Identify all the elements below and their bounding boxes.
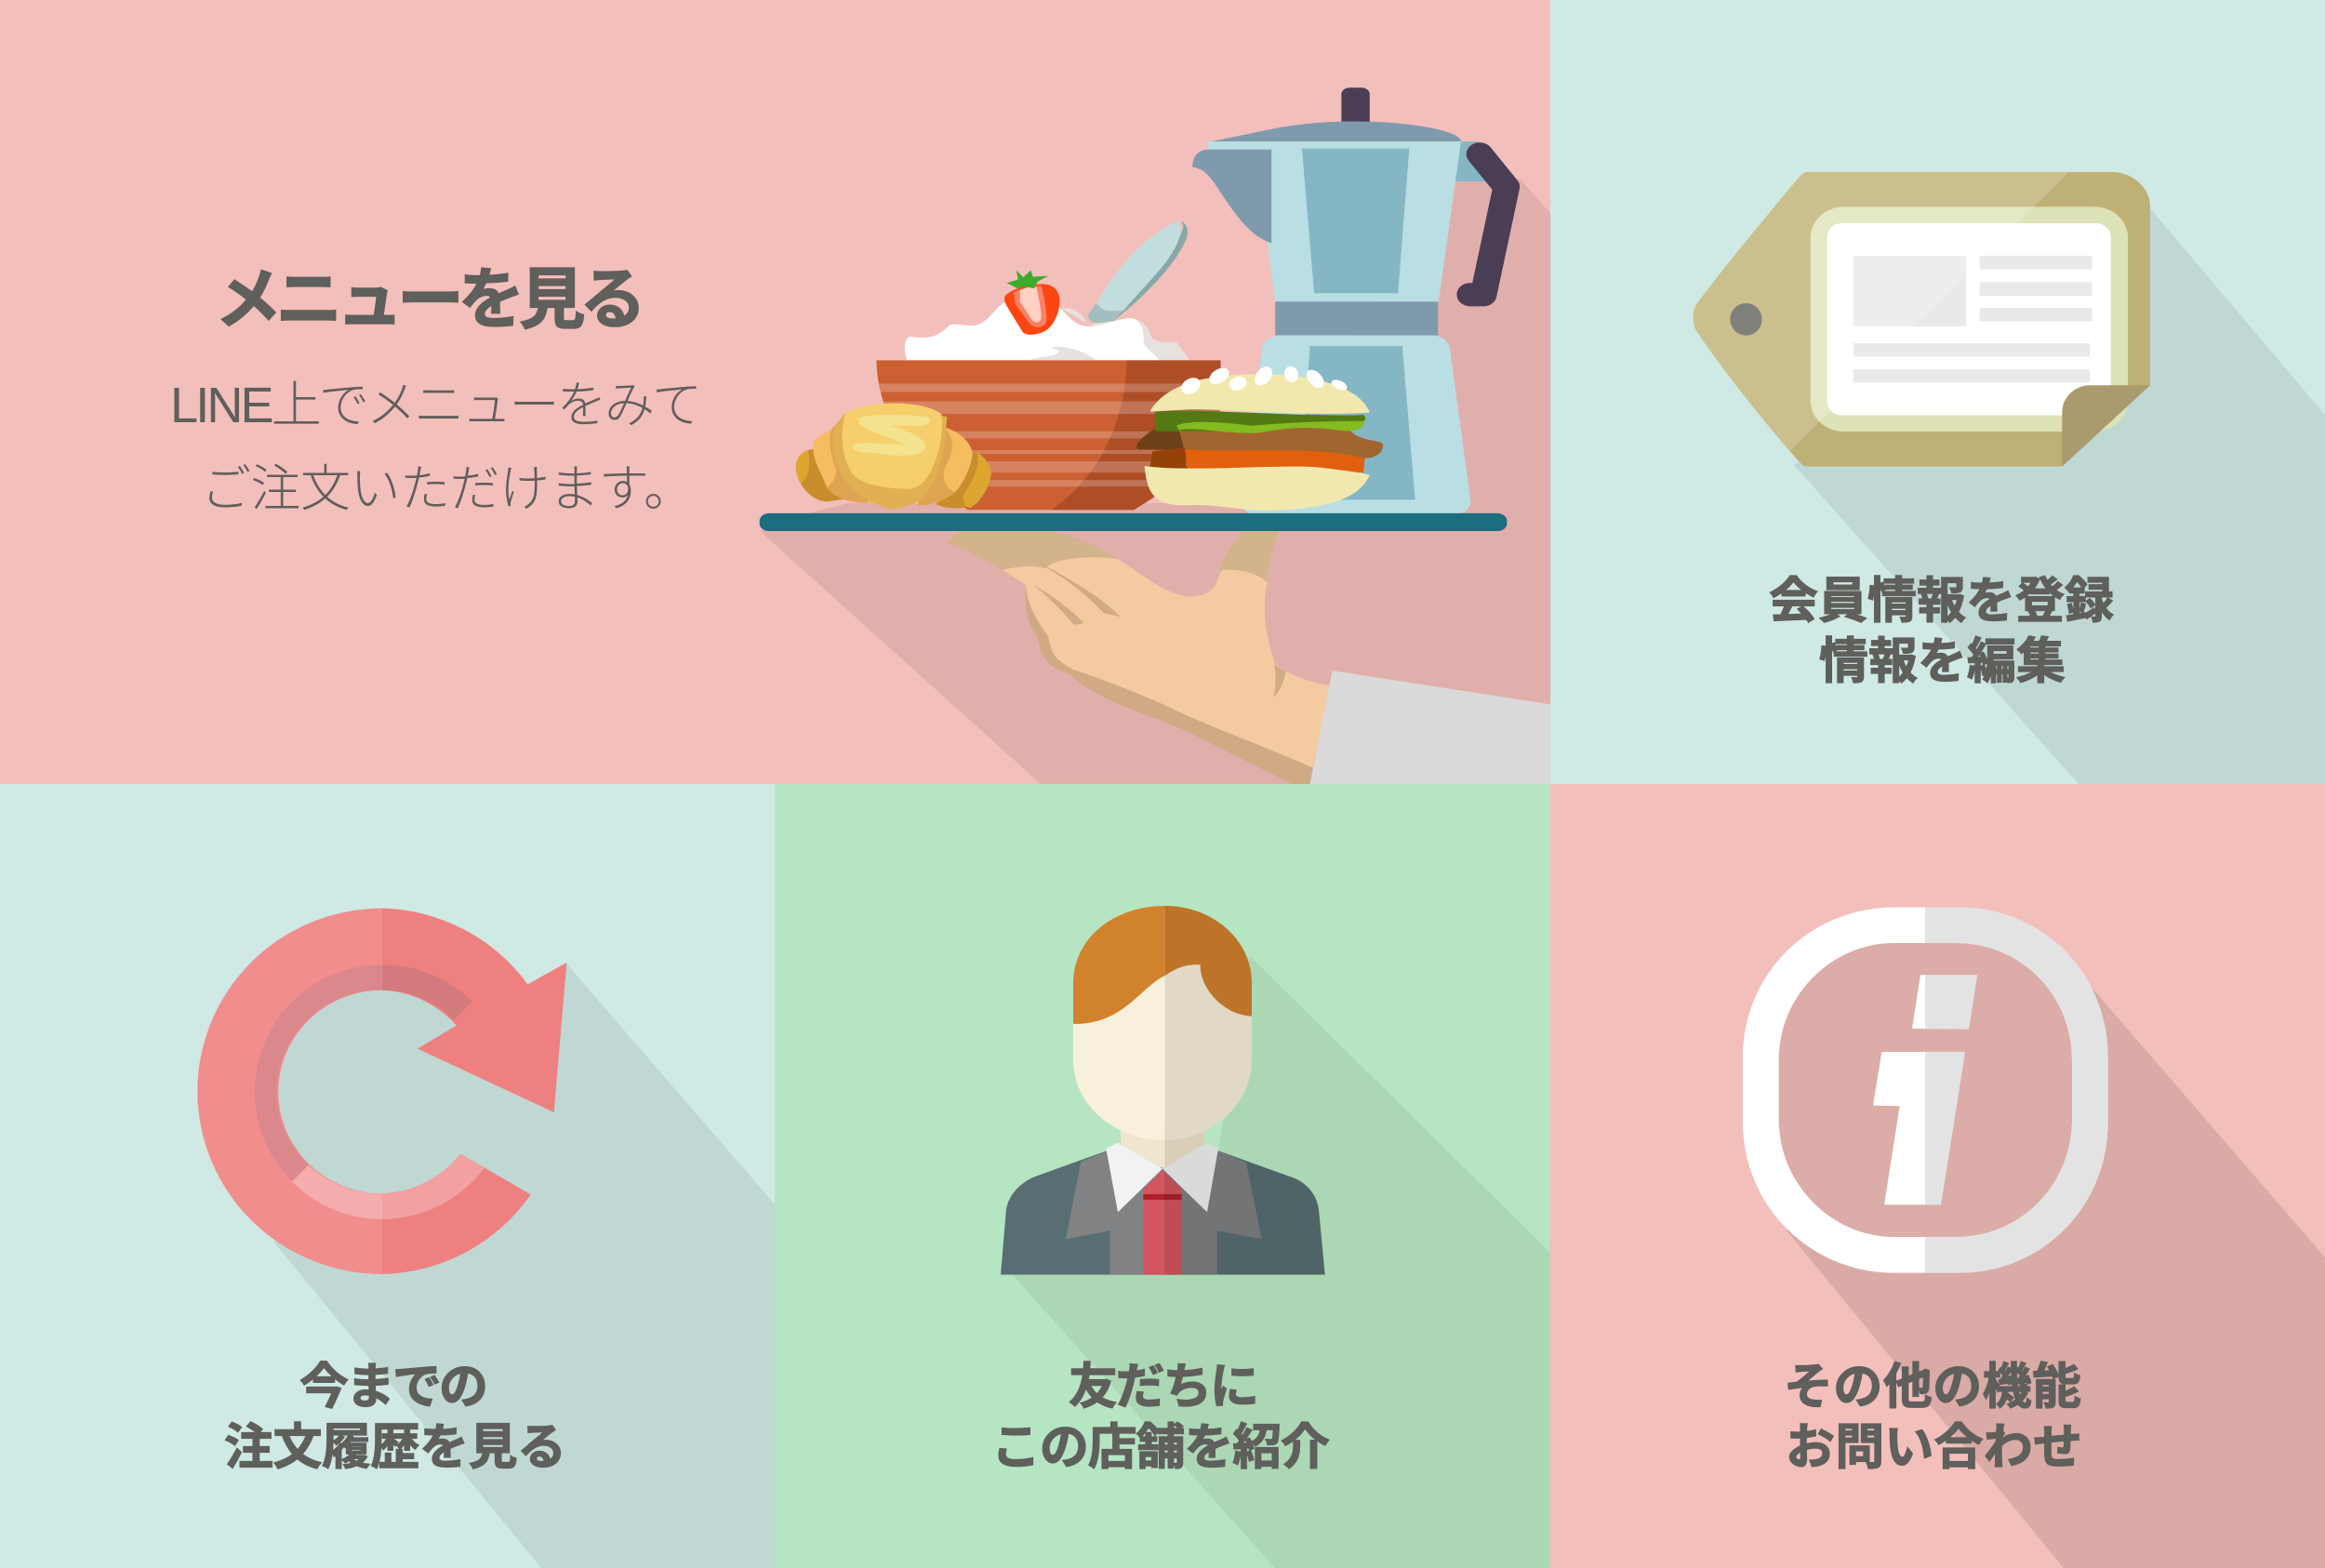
icon: information (1743, 908, 2108, 1273)
label: other functions (1784, 1360, 2082, 1475)
long shadow: info icon (1787, 962, 2325, 1568)
icon: burger (1136, 364, 1383, 511)
icon: sleeve (1310, 671, 1550, 784)
label: other functions: その他の機能 (1784, 1360, 2081, 1415)
panel: order history (0, 784, 775, 1568)
label: refer friends: この店舗を紹介 (991, 1420, 1330, 1475)
panel: other functions (1743, 908, 2325, 1568)
icon: bowl (876, 360, 1221, 510)
icon: person (1001, 906, 1325, 1275)
icon: tray (760, 513, 1507, 531)
text: menu description: LINE上でメニューをみて (170, 378, 702, 433)
label: member info: 情報を編集 (1819, 634, 2066, 689)
panel: refer friends (775, 784, 1550, 1568)
label: order history (224, 1360, 566, 1475)
panel: menu (174, 87, 1550, 784)
heading: menu: メニューを見る (215, 263, 646, 338)
icon: hand (947, 531, 1331, 784)
icon: moka pot (1192, 87, 1507, 513)
long shadow: tray and pot (760, 179, 1550, 784)
icon: strawberry (1004, 271, 1059, 335)
label: other functions: お問い合わせ (1786, 1420, 2082, 1475)
icon: croissant (796, 404, 991, 509)
panel: member info (1550, 0, 2325, 784)
text: menu description (170, 378, 702, 517)
icon: refresh arrow (197, 909, 566, 1274)
label: member info (1769, 574, 2114, 689)
icon: whipped cream (905, 301, 1189, 360)
label: refer friends (991, 1360, 1330, 1475)
icon: spoon (1088, 220, 1188, 323)
long shadow: person (1013, 956, 1550, 1568)
long shadow: tag (1794, 207, 2325, 784)
text: menu description: ご注文いただけます。 (201, 461, 694, 517)
label: refer friends: 友だちに (1069, 1360, 1259, 1415)
label: order history: 注文履歴を見る (224, 1420, 566, 1475)
long shadow: arrow (274, 963, 775, 1568)
illustration: hand holding tray with food (760, 87, 1550, 784)
icon: tag (1694, 172, 2150, 467)
label: member info: 会員情報を登録 (1769, 574, 2114, 629)
label: order history: 今までの (299, 1360, 488, 1415)
